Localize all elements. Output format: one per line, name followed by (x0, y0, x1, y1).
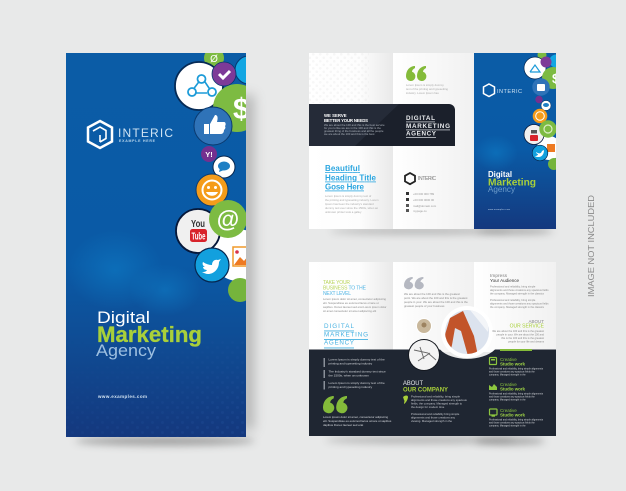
band text (324, 113, 385, 136)
service body text: people for your life and dreams (508, 340, 545, 344)
body text: Lorem Ipsum is simply dummy text of (325, 194, 371, 198)
heading: about our service (510, 319, 545, 330)
service item 2: company. Managed strength in the (489, 398, 526, 402)
body text: sapibus. Donec laoreet sed erat Lorem ipsum dolor (323, 305, 386, 309)
body text: sit amet consectetur sit amet adipiscing elit (323, 309, 376, 313)
small cover title: Agency (488, 185, 515, 194)
social icons small: $ (552, 71, 560, 86)
small cover title: Marketing (488, 178, 536, 188)
logo: INTERIC (88, 121, 173, 148)
impress body text: Professional and reliability, bring simple (490, 284, 536, 288)
service item 2: Creative (500, 382, 517, 387)
impress body text: alignments and those creations any spacious fields (490, 288, 549, 292)
about company text: Professional and reliability, bring simple (411, 394, 460, 398)
about company text: alignments and those creations any (411, 416, 456, 420)
contact list: +00 000 0000 00 (413, 198, 435, 202)
logo: small INTERIC (484, 84, 522, 96)
heading: impress your audience: Your Audience (490, 278, 519, 283)
service body text: people in your. We are about the 100 and (496, 332, 545, 336)
heading: beautiful heading title (325, 164, 377, 192)
about company text: alignments and those creations any spacious (411, 398, 467, 402)
dark lower section (309, 350, 556, 436)
bullet list (324, 358, 386, 390)
service item 1: Professional and reliability, bring simple alignments (489, 368, 544, 370)
band text: we are about the 100 and this is the best (324, 132, 375, 136)
photo: small tan circle (416, 318, 432, 334)
contact list: mypage.co (413, 209, 427, 213)
photo: bridge circle (441, 306, 493, 358)
dark band (309, 104, 455, 146)
icon: green top (204, 53, 224, 66)
icon: dollar (213, 84, 246, 132)
icon: twitter bird (195, 248, 229, 282)
service body text: this is the 100 and this is the greatest (501, 336, 544, 340)
heading: beautiful heading title: Heading Title (325, 174, 377, 182)
quote body text: point. We are about the 100 and this is the greatest (404, 296, 468, 300)
icon: smiley (196, 174, 228, 206)
service item 1 (489, 357, 544, 376)
heading: take your business (323, 280, 367, 297)
heading: impress your audience (490, 273, 519, 283)
photo: sketch circle (408, 339, 440, 371)
icon: YouTube (176, 209, 220, 253)
icon: cyan circle (234, 56, 246, 84)
about company text: fields, the company. Managed strength to (411, 402, 463, 406)
heading: beautiful heading title: Beautiful (325, 164, 360, 173)
quote text: industry. Lorem Ipsum has (406, 91, 439, 95)
band text: We are about the 100 and this is the best service (324, 123, 385, 127)
service item 2: and those creations any spacious fields the (489, 396, 535, 398)
icon: yahoo (201, 146, 217, 162)
heading: digital marketing agency cyan: DIGITAL (324, 323, 354, 330)
green accent bar (500, 349, 532, 351)
panel: small brochure cover (474, 50, 564, 234)
icon: check mark (212, 62, 236, 86)
body text: dummy text ever since the 1500s, when an (325, 206, 379, 210)
icon: gray quote (404, 277, 424, 289)
bullet list: printing and typesetting industry (328, 362, 373, 366)
panel: large brochure cover (66, 48, 264, 446)
service item 2 (489, 382, 544, 402)
impress body text: the company. Managed strength in the classics (490, 292, 545, 296)
quote text on dark: dapibus Donec laoreet sed erat (323, 423, 363, 427)
service item 1: and those creations any spacious fields the (489, 370, 535, 374)
bullet list: printing and typesetting industry (328, 385, 373, 389)
service item 3: Creative (500, 408, 517, 413)
icon: chat bubble (213, 156, 235, 178)
icon: green bottom (228, 278, 246, 302)
heading: about our company: ABOUT (403, 381, 423, 387)
service item 3: Professional and reliability, bring simple alignments (489, 418, 544, 422)
small cover title: Digital (488, 170, 512, 179)
quote text on dark: elit. Suspendisse eu euismod lacus ornare ut sapibus (323, 419, 392, 423)
service item 3: company. Managed strength in the (489, 424, 526, 428)
bullet list: Lorem Ipsum is simply dummy text of the (328, 381, 385, 385)
contact list: +00 000 000 789 (413, 192, 435, 196)
small website address: www.examples.com (488, 209, 510, 211)
heading: take your business: NEXT LEVEL (323, 291, 351, 297)
heading: impress your audience: Impress (490, 273, 508, 278)
quote text: Lorem Ipsum is simply dummy (406, 83, 444, 87)
bullet list: Lorem Ipsum is simply dummy text of the (328, 358, 385, 362)
impress body text: the company. Managed strength in the classics (490, 305, 545, 309)
logo: INTERIC: INTERIC (118, 126, 173, 140)
band heading: digital marketing agency: DIGITAL (406, 115, 435, 122)
band text: BETTER YOUR NEEDS (324, 118, 368, 123)
body text: elit. Suspendisse eu euismod lacus ornare ut (323, 301, 379, 305)
cover title: Digital (97, 308, 150, 327)
icon: green top: Ø (210, 54, 218, 65)
about company text: the design for modern time (411, 405, 445, 409)
panel: tri-fold inside (309, 262, 556, 444)
quote body text: greatest people of your business (404, 304, 445, 308)
icon: yahoo: Y! (205, 150, 213, 159)
cover title: Marketing (97, 322, 202, 347)
small cover title (488, 170, 536, 194)
band text: greatest thing of the business and all the people (324, 129, 384, 133)
panel: tri-fold outside (309, 53, 510, 234)
body text: Ipsum has been the industry's standard (325, 202, 374, 206)
contact list: mail@domain.com (413, 204, 437, 208)
logo: small dark: INTERIC (418, 176, 436, 182)
body text: unknown printer took a galley (325, 210, 362, 214)
icon: dollar: $ (233, 93, 250, 126)
about company text: viewing. Managed strength in the (411, 419, 452, 423)
heading: about our company (403, 381, 448, 394)
icon: at sign: @ (217, 206, 239, 232)
service item 1: company. Managed strength in the (489, 374, 526, 376)
icon: large green quote (323, 396, 347, 413)
service item 3 (489, 408, 544, 428)
heading: take your business: BUSINESS TO THE (323, 286, 367, 292)
contact list (406, 192, 437, 213)
social icons small (524, 53, 556, 170)
service body text: We are about the 100 and this is the greatest (492, 329, 544, 333)
heading: take your business: TAKE YOUR (323, 280, 350, 286)
band text: for you to like we are in the 100 and this is the (324, 126, 381, 130)
band heading: digital marketing agency: AGENCY (406, 130, 437, 138)
bullet list: the 1500s, when an unknown (328, 374, 369, 378)
quote body text: We are about the 100 and this is the greatest (404, 292, 460, 296)
heading: digital marketing agency cyan: AGENCY (324, 340, 355, 346)
social media icon cluster (174, 53, 246, 302)
bullet list: The Industry's standard dummy text since (328, 370, 386, 374)
quote text: text of the printing and typesetting (406, 87, 448, 91)
icon: thumbs up (194, 107, 232, 145)
band text: WE SERVE (324, 113, 347, 118)
website address: www.examples.com (97, 394, 147, 399)
icon: small green quote mark (403, 396, 408, 404)
heading: digital marketing agency cyan: MARKETING (324, 332, 368, 338)
band heading: digital marketing agency (406, 115, 450, 138)
about company text: Professional and reliability bring simple (411, 412, 460, 416)
icon: picture (214, 230, 246, 280)
service item 1: Studio work (500, 362, 525, 366)
icon: green quote (406, 66, 426, 81)
icon: YouTube: You (191, 219, 205, 230)
logo: small dark (405, 173, 436, 184)
icon: at sign (209, 200, 247, 238)
icon: share network (175, 62, 223, 110)
body text: the printing and typesetting industry. Lorem (325, 198, 379, 202)
icon: YouTube: Tube (192, 232, 206, 242)
heading: digital marketing agency cyan (324, 323, 368, 348)
heading: about our company: OUR COMPANY (403, 388, 448, 394)
band heading: digital marketing agency: MARKETING (406, 123, 450, 130)
body text: Lorem ipsum dolor sit amet, consectetur adipiscing (323, 297, 386, 301)
service item 2: Professional and reliability, bring simple alignments (489, 392, 544, 396)
heading: beautiful heading title: Gose Here (325, 182, 365, 192)
cover title: Agency (96, 341, 157, 360)
quote body text: people in your. We are about the 100 and this is the (404, 300, 468, 304)
heading: about our service: OUR SERVICE (510, 324, 545, 330)
logo: INTERIC: EXAMPLE HERE (119, 139, 156, 143)
impress body text: alignments and those creations any spacious fields (490, 302, 549, 306)
service item 3: and those creations any spacious fields the (489, 422, 535, 424)
service item 1: Creative (500, 357, 517, 362)
quote text on dark: Lorem ipsum dolor sit amet, consectetur adipiscing (323, 415, 388, 419)
note: image not included: IMAGE NOT INCLUDED (587, 195, 596, 297)
impress body text: Professional and reliability, bring simple (490, 298, 536, 302)
service item 2: Studio work (500, 386, 525, 392)
heading: about our service: ABOUT (528, 319, 544, 324)
service item 3: Studio work (500, 412, 525, 418)
cover title (96, 308, 202, 360)
logo: small INTERIC: INTERIC (497, 89, 522, 95)
